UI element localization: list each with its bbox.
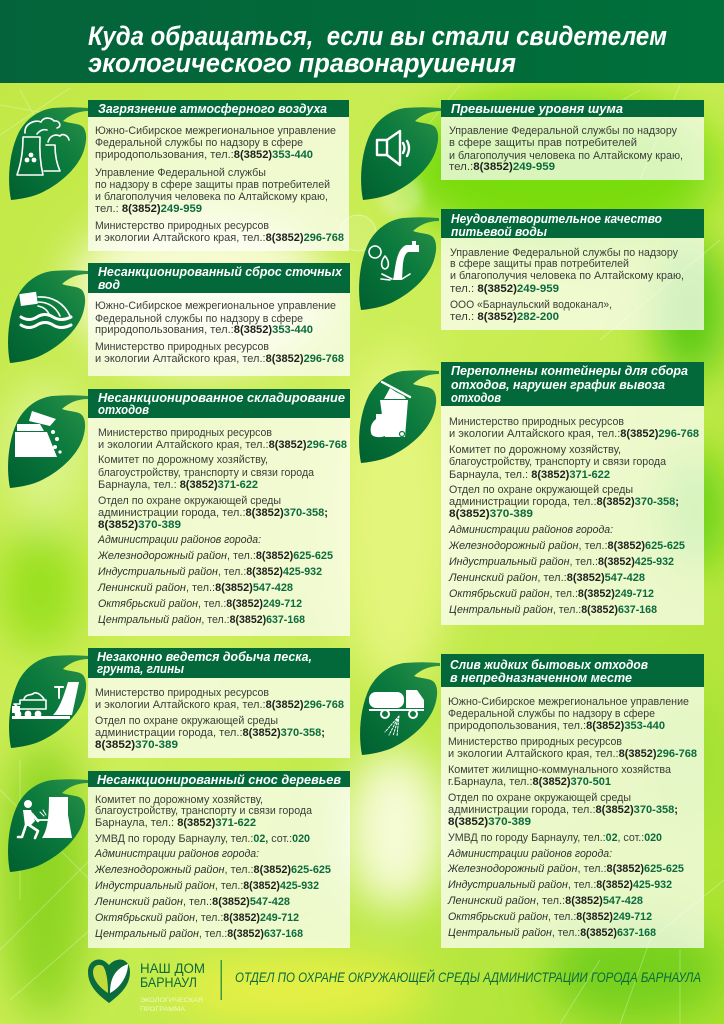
icon: speaker on leaf — [361, 107, 441, 200]
panel: illegal sand extraction — [9, 648, 350, 758]
panel heading — [88, 648, 350, 678]
contacts — [447, 696, 697, 939]
contacts: Администрации районов города: — [97, 534, 261, 546]
contacts: и благополучия человека по Алтайскому краю, — [449, 150, 683, 162]
contacts: Отдел по охране окружающей среды — [449, 484, 633, 496]
contacts: Южно-Сибирское межрегиональное управление — [95, 125, 336, 137]
contacts — [97, 427, 347, 626]
panel heading — [88, 389, 350, 418]
contacts: администрации города, тел.:8(3852)370-358; — [449, 496, 679, 508]
contacts: Железнодорожный район, тел.:8(3852)625-625 — [447, 863, 684, 875]
contacts: Индустриальный район, тел.:8(3852)425-932 — [98, 566, 322, 578]
contacts: в сфере защиты прав потребителей — [449, 137, 637, 149]
contacts — [95, 687, 344, 751]
panel heading — [88, 263, 350, 293]
contacts: Южно-Сибирское межрегиональное управление — [448, 696, 689, 708]
contacts: Ленинский район, тел.:8(3852)547-428 — [94, 896, 290, 908]
contacts — [94, 794, 331, 940]
logo wordmark: ПРОГРАММА — [140, 1006, 186, 1013]
icon: dump truck on leaf — [8, 395, 88, 488]
panel: unauthorized waste storage — [8, 389, 350, 636]
icon: lumberjack and stump on leaf — [8, 779, 88, 872]
contacts: Федеральной службы по надзору в сфере — [95, 137, 303, 149]
panel body — [88, 771, 350, 948]
contacts: Администрации районов города: — [448, 524, 613, 536]
panel heading: Несанкционированный сброс сточных — [98, 264, 343, 279]
logo wordmark: НАШ ДОМ — [140, 961, 205, 976]
panel body — [441, 100, 704, 180]
contacts: и благополучия человека по Алтайскому краю, — [95, 191, 328, 203]
contacts: Ленинский район, тел.:8(3852)547-428 — [97, 582, 293, 594]
contacts: 8(3852)370-389 — [98, 519, 181, 531]
footer — [88, 960, 701, 1013]
panel: drinking water — [359, 209, 704, 330]
panel body — [441, 654, 704, 948]
contacts: Отдел по охране окружающей среды — [448, 792, 631, 804]
contacts: Управление Федеральной службы — [95, 167, 266, 179]
panel heading — [441, 209, 704, 239]
contacts: Министерство природных ресурсов — [95, 220, 269, 232]
icon: discharge pipe on leaf — [8, 270, 88, 363]
panel heading: отходов, нарушен график вывоза — [451, 377, 665, 392]
contacts: благоустройству, транспорту и связи города — [449, 456, 667, 468]
contacts: Барнаула, тел.: 8(3852)371-622 — [449, 469, 610, 481]
panel heading: в непредназначенном месте — [450, 670, 632, 685]
title: экологического правонарушения — [88, 48, 516, 78]
contacts: 8(3852)370-389 — [449, 508, 533, 520]
contacts: Центральный район, тел.:8(3852)637-168 — [449, 604, 657, 616]
contacts: Федеральной службы по надзору в сфере — [448, 708, 655, 720]
title — [88, 21, 667, 78]
contacts: благоустройству, транспорту и связи города — [95, 805, 313, 817]
panel heading: Несанкционированное складирование — [98, 390, 345, 405]
contacts: Отдел по охране окружающей среды — [95, 715, 278, 727]
contacts: и экологии Алтайского края, тел.:8(3852)296-768 — [95, 699, 344, 711]
panel heading: отходов — [98, 402, 149, 417]
contacts — [449, 125, 683, 173]
contacts: по надзору в сфере защиты прав потребителей — [95, 179, 330, 191]
contacts: тел.: 8(3852)282-200 — [450, 311, 559, 323]
contacts: Октябрьский район, тел.:8(3852)249-712 — [448, 911, 652, 923]
icon: faucet on leaf — [359, 217, 439, 310]
contacts: администрации города, тел.:8(3852)370-358; — [95, 727, 325, 739]
contacts: и благополучия человека по Алтайскому краю, — [450, 270, 684, 282]
panel: overflowing containers — [359, 362, 704, 625]
contacts: Министерство природных ресурсов — [95, 687, 269, 699]
title banner — [0, 0, 724, 83]
contacts: администрации города, тел.:8(3852)370-358; — [98, 507, 328, 519]
contacts: природопользования, тел.:8(3852)353-440 — [448, 720, 665, 732]
panel body — [441, 362, 704, 625]
contacts: и экологии Алтайского края, тел.:8(3852)296-768 — [98, 439, 347, 451]
contacts: Министерство природных ресурсов — [98, 427, 272, 439]
contacts — [95, 125, 344, 244]
contacts: Центральный район, тел.:8(3852)637-168 — [448, 927, 656, 939]
contacts: тел.:8(3852)249-959 — [449, 161, 555, 173]
contacts: Барнаула, тел.: 8(3852)371-622 — [98, 479, 258, 491]
contacts: Индустриальный район, тел.:8(3852)425-932 — [449, 556, 674, 568]
contacts: Комитет по дорожному хозяйству, — [95, 794, 263, 806]
contacts: администрации города, тел.:8(3852)370-358; — [448, 804, 678, 816]
logo: heart with leaves — [88, 960, 130, 1003]
contacts: Администрации районов города: — [94, 848, 259, 860]
contacts: Федеральной службы по надзору в сфере — [95, 313, 303, 325]
logo wordmark — [140, 961, 205, 1013]
icon: tanker truck on leaf — [360, 662, 440, 755]
contacts — [450, 247, 684, 323]
panel body — [88, 100, 349, 251]
panel body — [88, 389, 350, 636]
contacts: природопользования, тел.:8(3852)353-440 — [95, 324, 313, 336]
panel heading: Незаконно ведется добыча песка, — [97, 649, 312, 664]
contacts: Индустриальный район, тел.:8(3852)425-932 — [95, 880, 319, 892]
panel: wastewater discharge — [8, 263, 350, 376]
contacts: ООО «Барнаульский водоканал», — [450, 299, 612, 311]
contacts: в сфере защиты прав потребителей — [450, 258, 629, 270]
contacts: тел.: 8(3852)249-959 — [450, 283, 559, 295]
contacts: Октябрьский район, тел.:8(3852)249-712 — [95, 912, 299, 924]
panel heading — [441, 100, 704, 117]
panel heading: Загрязнение атмосферного воздуха — [98, 101, 327, 116]
contacts: Железнодорожный район, тел.:8(3852)625-625 — [94, 864, 331, 876]
panel heading: грунта, глины — [97, 661, 184, 676]
panel: noise — [361, 100, 704, 200]
panel: unauthorized tree felling — [8, 771, 350, 948]
contacts: Октябрьский район, тел.:8(3852)249-712 — [449, 588, 654, 600]
contacts: Комитет жилищно-коммунального хозяйства — [448, 764, 672, 776]
contacts: Октябрьский район, тел.:8(3852)249-712 — [98, 598, 302, 610]
contacts: 8(3852)370-389 — [95, 739, 178, 751]
panel heading — [441, 362, 704, 406]
contacts: г.Барнаула, тел.:8(3852)370-501 — [448, 776, 611, 788]
logo wordmark: ЭКОЛОГИЧЕСКАЯ — [140, 997, 203, 1004]
contacts: и экологии Алтайского края, тел.:8(3852)296-768 — [449, 428, 699, 440]
panel heading: вод — [98, 277, 120, 292]
contacts: Управление Федеральной службы по надзору — [449, 125, 677, 137]
panel body — [441, 209, 704, 330]
contacts: Отдел по охране окружающей среды — [98, 495, 281, 507]
contacts: благоустройству, транспорту и связи города — [98, 467, 315, 479]
contacts: Железнодорожный район, тел.:8(3852)625-625 — [448, 540, 685, 552]
contacts: УМВД по городу Барнаулу, тел.:02, сот.:020 — [448, 832, 662, 844]
contacts: Ленинский район, тел.:8(3852)547-428 — [447, 895, 643, 907]
contacts: и экологии Алтайского края, тел.:8(3852)296-768 — [448, 748, 697, 760]
contacts — [448, 416, 699, 616]
icon: cooling towers on leaf — [9, 107, 89, 200]
contacts: Центральный район, тел.:8(3852)637-168 — [95, 928, 303, 940]
panel body — [88, 648, 350, 758]
panel heading: Несанкционированный снос деревьев — [97, 772, 341, 787]
contacts: 8(3852)370-389 — [448, 816, 531, 828]
contacts: Барнаула, тел.: 8(3852)371-622 — [95, 817, 256, 829]
contacts: Индустриальный район, тел.:8(3852)425-932 — [448, 879, 672, 891]
icon: mining truck on leaf — [9, 655, 89, 748]
contacts: Центральный район, тел.:8(3852)637-168 — [98, 614, 305, 626]
contacts: Министерство природных ресурсов — [95, 341, 269, 353]
contacts: и экологии Алтайского края, тел.:8(3852)296-768 — [95, 232, 344, 244]
panel heading: Слив жидких бытовых отходов — [450, 657, 648, 672]
contacts: Комитет по дорожному хозяйству, — [449, 444, 621, 456]
panel heading: Переполнены контейнеры для сбора — [451, 363, 688, 378]
contacts: Министерство природных ресурсов — [449, 416, 624, 428]
contacts: Управление Федеральной службы по надзору — [450, 247, 678, 259]
panel heading — [441, 654, 704, 687]
panel heading: отходов — [451, 390, 501, 405]
icon: waste bin on leaf — [359, 370, 439, 463]
contacts: Южно-Сибирское межрегиональное управление — [95, 300, 336, 312]
panel heading: питьевой воды — [451, 224, 547, 239]
panel heading: Превышение уровня шума — [451, 101, 623, 116]
contacts: Ленинский район, тел.:8(3852)547-428 — [448, 572, 645, 584]
contacts: тел.: 8(3852)249-959 — [95, 203, 202, 215]
contacts: Министерство природных ресурсов — [448, 736, 622, 748]
contacts — [95, 300, 344, 365]
title: Куда обращаться, если вы стали свидетелем — [88, 21, 667, 51]
contacts: и экологии Алтайского края, тел.:8(3852)296-768 — [95, 353, 344, 365]
logo wordmark: БАРНАУЛ — [140, 975, 197, 990]
panel heading: Неудовлетворительное качество — [451, 211, 662, 226]
contacts: Комитет по дорожному хозяйству, — [98, 454, 268, 466]
contacts: Железнодорожный район, тел.:8(3852)625-625 — [97, 550, 333, 562]
contacts: УМВД по городу Барнаулу, тел.:02, сот.:020 — [95, 833, 310, 845]
panel: liquid waste dumping — [360, 654, 704, 948]
contacts: природопользования, тел.:8(3852)353-440 — [95, 149, 313, 161]
panel: air pollution — [9, 100, 349, 251]
contacts: Администрации районов города: — [447, 848, 612, 860]
panel body — [88, 263, 350, 376]
